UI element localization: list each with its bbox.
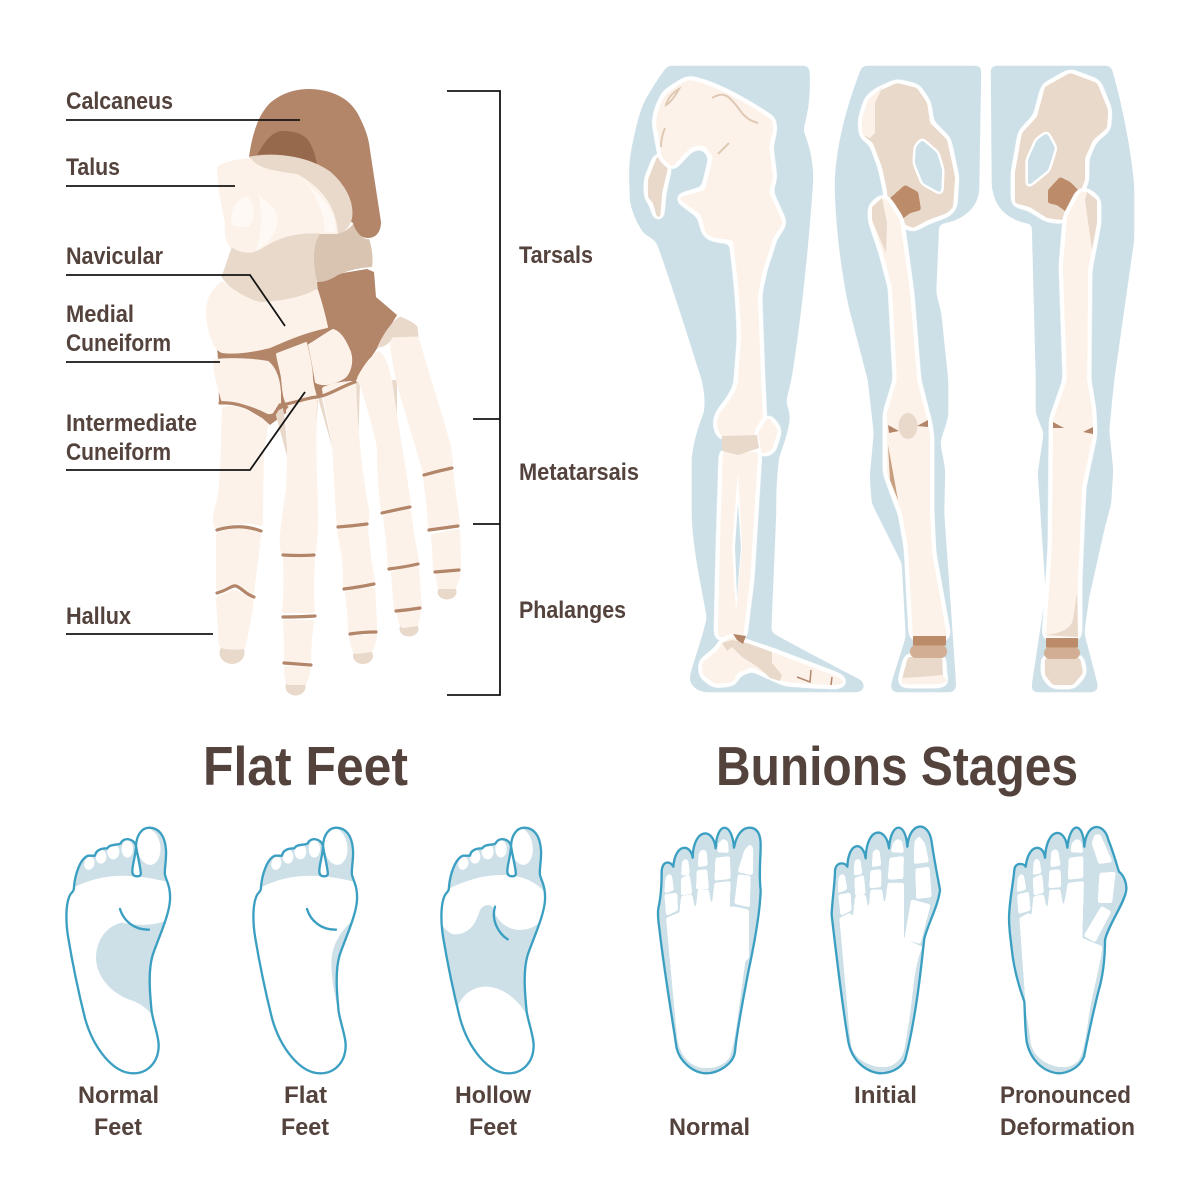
shadows between metatarsals	[222, 380, 397, 464]
foot: flat feet	[250, 822, 360, 1073]
label: initial: Initial	[854, 1082, 917, 1109]
label: flat feet: Feet	[281, 1114, 329, 1141]
bone: intermediate cuneiform block	[277, 343, 316, 406]
bone: knee cartilage	[722, 435, 759, 455]
bone: hip joint	[888, 185, 921, 220]
label: pronounced deformation: Deformation	[1000, 1114, 1135, 1141]
label: normal feet: Feet	[94, 1114, 142, 1141]
label: flat feet	[281, 1082, 329, 1141]
bone: ankle junction brown	[217, 269, 397, 425]
label: intermediate cuneiform	[66, 410, 197, 466]
silhouette: front leg	[836, 67, 980, 691]
label: normal feet: Normal	[78, 1082, 159, 1109]
label: intermediate cuneiform: Cuneiform	[66, 439, 171, 466]
bone: pelvis back	[1015, 73, 1108, 220]
bone: first tarsal block	[215, 359, 280, 413]
bone: talus	[218, 159, 337, 253]
bone: lateral cuneiform block	[309, 330, 351, 384]
bone: side foot	[702, 637, 845, 685]
label: medial cuneiform: Medial	[66, 301, 134, 328]
joints between toe bones	[217, 382, 459, 665]
toe bones: hallux	[214, 407, 267, 649]
toe tip: fifth	[438, 584, 456, 600]
label: normal: Normal	[669, 1114, 750, 1141]
foot: bunion pronounced deformation	[1009, 827, 1126, 1073]
silhouette: back leg	[992, 67, 1133, 691]
bone: ankle lower band back	[1044, 647, 1080, 659]
metatarsal and tan tips	[220, 584, 456, 696]
label: phalanges: Phalanges	[519, 597, 626, 624]
panel: foot skeleton anatomy	[207, 89, 460, 696]
bone: side foot tarsals	[722, 640, 782, 681]
bone: ankle lower band	[910, 645, 947, 658]
bone: pelvis top shade	[661, 89, 758, 154]
bone: hip joint back	[1048, 177, 1080, 213]
bracket	[447, 91, 500, 695]
label: hallux: Hallux	[66, 603, 132, 630]
bone: talus tan band	[250, 155, 352, 234]
toe tip: second	[286, 678, 306, 696]
toe tip: fourth	[400, 622, 418, 636]
bone: femur and tibia front	[872, 198, 947, 637]
label: hollow feet: Feet	[469, 1114, 517, 1141]
foot: bunion normal	[658, 828, 761, 1073]
label: hollow feet	[455, 1082, 531, 1141]
bone: calcaneus inner shade	[257, 131, 317, 165]
title: bunions stages: Bunions Stages	[716, 735, 1078, 797]
pelvic opening back	[1028, 133, 1055, 186]
bone: pelvis front	[862, 83, 955, 228]
toe tip: hallux	[220, 642, 244, 664]
toe bones: second	[281, 399, 317, 684]
label: navicular: Navicular	[66, 243, 163, 270]
bone: femur head shade back	[1085, 192, 1097, 250]
label lines for foot skeleton	[66, 120, 305, 634]
foot: hollow feet	[440, 826, 546, 1074]
knee joints	[888, 420, 928, 433]
bone: ankle joint	[733, 634, 746, 644]
pelvic opening	[915, 140, 942, 193]
labels: foot bones	[66, 88, 197, 630]
bone: heel back	[1045, 658, 1083, 685]
foot: normal feet	[63, 822, 173, 1073]
bone: lower tibia shade	[1046, 593, 1078, 637]
label: calcaneus: Calcaneus	[66, 88, 173, 115]
panel: leg skeleton front view	[836, 67, 980, 691]
label: pronounced deformation: Pronounced	[1000, 1082, 1131, 1109]
toe bones: fourth	[358, 352, 421, 627]
label: talus: Talus	[66, 154, 120, 181]
title: flat feet: Flat Feet	[203, 735, 408, 797]
bone: fifth metatarsal cap	[378, 317, 418, 347]
toe bones: fifth	[390, 335, 460, 588]
bone: ankle upper band back	[1046, 638, 1078, 648]
foot: bunion initial	[832, 827, 940, 1073]
bone: calcaneus	[249, 89, 381, 238]
toe tip: third	[353, 648, 373, 664]
bone: ankle upper band	[913, 636, 946, 646]
bone: navicular	[222, 234, 320, 303]
labels: bunion stages	[669, 1082, 1135, 1141]
bone: fibula	[888, 445, 898, 500]
bone: cuboid	[314, 224, 373, 282]
label: medial cuneiform	[66, 301, 171, 357]
toe bones: third	[323, 382, 376, 653]
labels: flat feet types	[78, 1082, 531, 1141]
gap between tibia and fibula	[732, 472, 742, 612]
label: pronounced deformation	[1000, 1082, 1135, 1141]
bone: talus highlight	[231, 176, 336, 250]
label: metatarsais: Metatarsais	[519, 459, 639, 486]
panel: leg skeleton side view	[630, 67, 863, 691]
bone: pelvis and femur	[656, 80, 783, 436]
label: tarsals: Tarsals	[519, 242, 593, 269]
bone: sacrum	[648, 155, 668, 218]
joints: side foot toes	[797, 670, 832, 685]
bone: patella	[758, 417, 778, 454]
bone: foot front	[902, 657, 948, 684]
knee joints back	[1053, 422, 1093, 434]
bone: medial cuneiform	[207, 282, 327, 353]
bone: foot front pale bottom	[902, 675, 948, 684]
bone: femur head shade	[872, 198, 887, 253]
label: flat feet: Flat	[284, 1082, 327, 1109]
panel: leg skeleton back view	[992, 67, 1133, 691]
bone: femur and tibia back	[1046, 192, 1097, 637]
bone: pelvis front pale area	[862, 86, 883, 138]
label: normal feet	[78, 1082, 159, 1141]
label: hollow feet: Hollow	[455, 1082, 531, 1109]
label: medial cuneiform: Cuneiform	[66, 330, 171, 357]
silhouette: side leg	[630, 67, 863, 691]
bone: patella front	[898, 413, 918, 439]
label: intermediate cuneiform: Intermediate	[66, 410, 197, 437]
labels: bone groups	[519, 242, 639, 624]
bone: tibia and fibula	[718, 452, 758, 637]
